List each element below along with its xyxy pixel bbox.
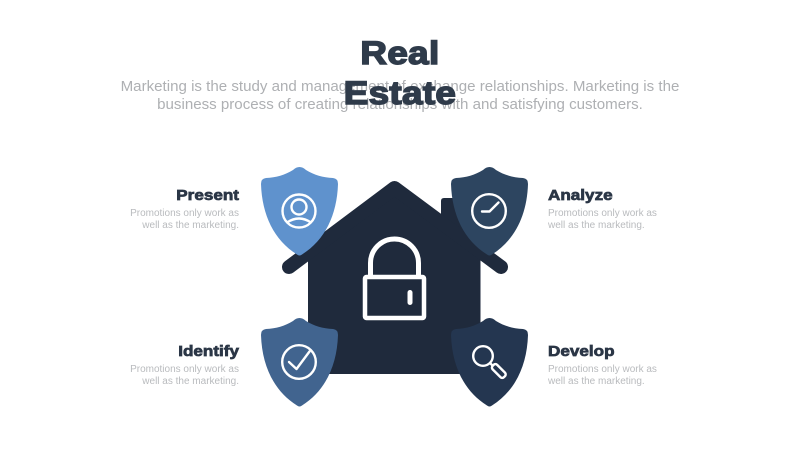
label: develop: well as the marketing. [548,376,645,387]
subtitle paragraph [121,78,679,113]
subtitle paragraph: business process of creating relationships with and satisfying customers. [157,96,643,113]
label: identify: well as the marketing. [142,376,239,387]
icon: check circle [282,345,316,379]
label: analyze: Promotions only work as [548,208,657,219]
subtitle paragraph: Marketing is the study and management of exchange relationships. Marketing is the [121,78,679,95]
label: develop: Promotions only work as [548,364,657,375]
icon: padlock [365,239,424,318]
title: Real [360,35,440,71]
label: present: Present [176,187,239,204]
icon: person [282,194,316,228]
label: identify [130,343,240,387]
label: analyze: well as the marketing. [548,220,645,231]
label: identify: Identify [178,343,239,360]
label: present: well as the marketing. [142,220,239,231]
icon: clock [472,194,506,228]
label: present: Promotions only work as [130,208,239,219]
label: present [130,187,240,231]
shield: analyze [451,167,528,256]
icon: house [289,188,501,374]
label: analyze [548,187,657,231]
shield: develop [451,318,528,406]
shield: present [261,167,338,256]
shield: identify [261,318,338,406]
title [344,35,456,111]
icon: magnifier [473,346,507,379]
label: develop: Develop [548,343,615,360]
title: Estate [344,75,456,111]
label: analyze: Analyze [548,187,613,204]
label: identify: Promotions only work as [130,364,239,375]
label: develop [548,343,657,387]
